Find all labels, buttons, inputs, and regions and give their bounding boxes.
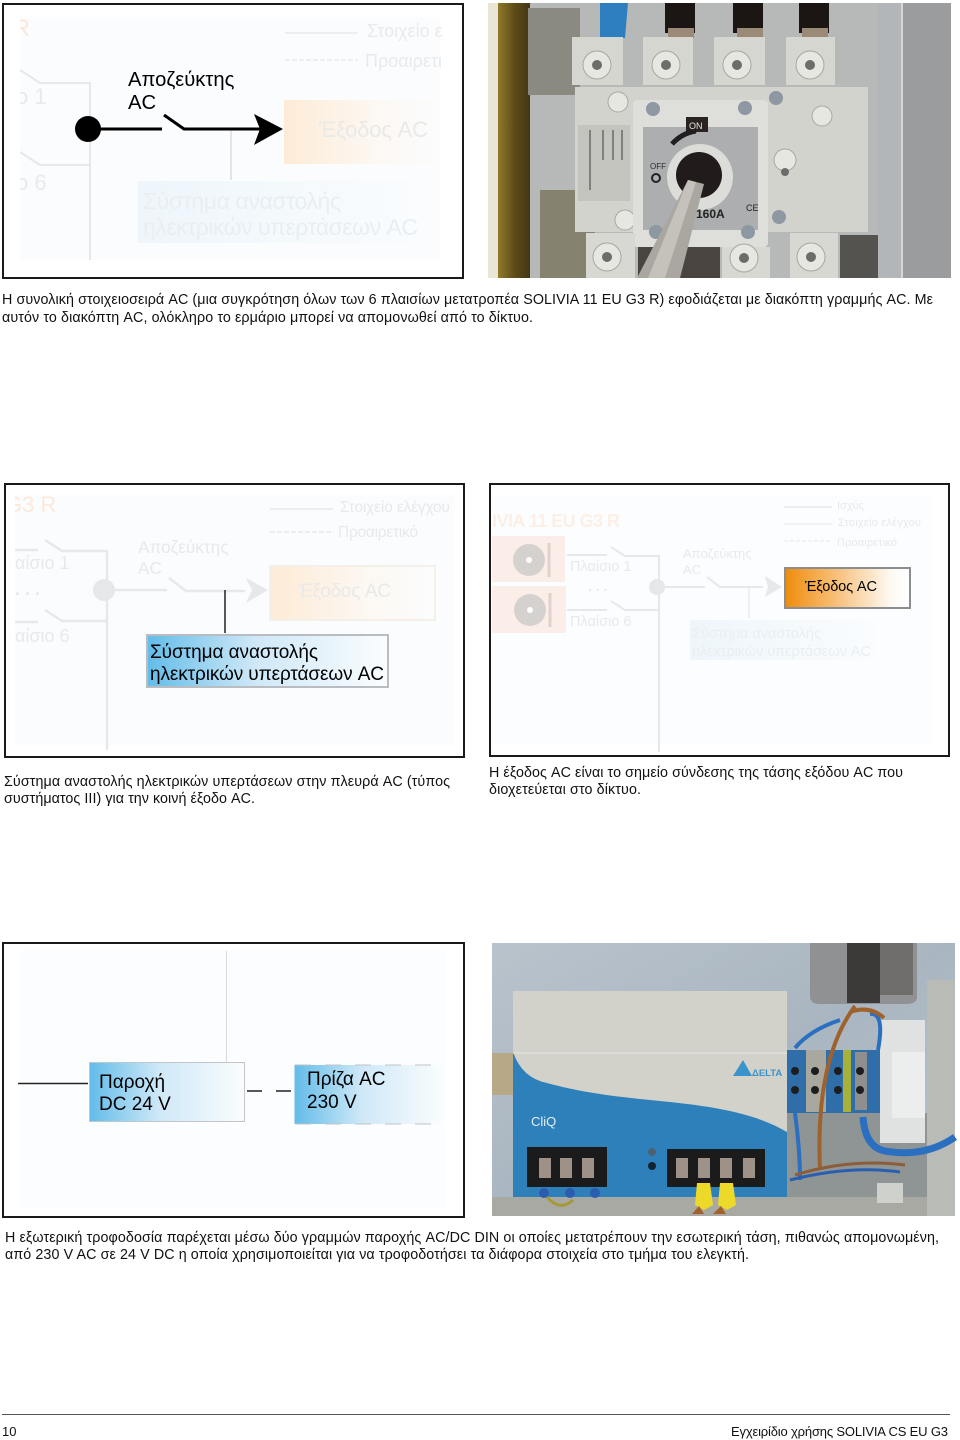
caption: power supply: Η εξωτερική τροφοδοσία παρέχεται μέσω δύο γραμμών παροχής AC/DC DIN οι οποίες μετατρέπουν την εσωτερική τάση, πιθανώς απομονωμένη, (5, 1230, 939, 1246)
footer: page number: 10 (2, 1424, 16, 1439)
faint labels: Στοιχείο ε (367, 21, 443, 41)
terminal blocks (527, 1147, 607, 1187)
photo: AC/DC DIN power supply: CliQ (531, 1114, 556, 1129)
panel: AC surge protection diagram (5, 484, 464, 757)
AC output box: Έξοδος AC (804, 579, 877, 595)
panel: AC surge protection diagram: . . . (15, 579, 40, 599)
panel: AC disconnector diagram: ηλεκτρικών υπερτάσεων AC (143, 214, 418, 240)
AC socket box: 230 V (307, 1092, 357, 1113)
wires (790, 1006, 955, 1180)
DC supply box: DC 24 V (99, 1094, 171, 1115)
surge protection box: ηλεκτρικών υπερτάσεων AC (150, 664, 384, 685)
DIN terminals (787, 1050, 882, 1113)
caption: AC output: Η έξοδος AC είναι το σημείο σύνδεσης της τάσης εξόδου AC που (489, 765, 903, 781)
photo: AC line switch: CE (746, 203, 759, 213)
panel: AC output diagram: Ισχύς (837, 500, 864, 512)
caption: AC output: διοχετεύεται στο δίκτυο. (489, 782, 641, 798)
panel: AC surge protection diagram: Έξοδος AC (297, 581, 391, 602)
blue ferrules (539, 1188, 600, 1198)
panel: AC output diagram (490, 484, 949, 756)
faint labels: Προαιρετι (365, 51, 442, 71)
caption: AC line switch: αυτόν το διακόπτη AC, ολόκληρο το ερμάριο μπορεί να απομονωθεί από το δίκτυο. (2, 310, 533, 326)
panel: power supply diagram (3, 943, 464, 1217)
yellow lugs (695, 1183, 736, 1210)
DC supply box: Παροχή (99, 1072, 165, 1093)
surge protection box (147, 635, 388, 687)
caption: power supply: από 230 V AC σε 24 V DC η οποία χρησιμοποιείται για να τροφοδοτήσει τα διάφορα στοιχεία στο τμήμα του ελεγκτή. (5, 1247, 749, 1263)
panel: AC output diagram: Στοιχείο ελέγχου (838, 517, 921, 529)
DC supply box (90, 1062, 244, 1122)
photo: AC line switch: 160A (696, 207, 725, 221)
panel: AC surge protection diagram: Στοιχείο ελέγχου (340, 499, 450, 516)
panel: AC output diagram: IVIA 11 EU G3 R (492, 511, 620, 531)
panel: AC surge protection diagram: AC (138, 558, 162, 578)
panel: AC disconnector diagram: Έξοδος AC (318, 117, 428, 142)
AC output box (785, 568, 910, 608)
caption: AC line switch: Η συνολική στοιχειοσειρά AC (μια συγκρότηση όλων των 6 πλαισίων μετατροπέα SOLIVIA 11 EU G3 R) εφοδιάζεται με διακόπτη γραμμής AC. Με (2, 292, 934, 308)
panel: AC output diagram: Προαιρετικό (837, 537, 897, 549)
panel: AC output diagram: Σύστημα αναστολής (692, 626, 821, 642)
surge connector (224, 590, 226, 633)
panel: AC output diagram: AC (683, 562, 701, 577)
disconnector label: AC (128, 92, 156, 114)
disconnector label: Αποζεύκτης (128, 69, 235, 91)
device body (513, 991, 787, 1197)
panel: AC output diagram: . . . (588, 578, 607, 594)
panel: AC disconnector diagram: ο 6 (16, 170, 47, 195)
panel: AC disconnector diagram: ο 1 (16, 84, 47, 109)
panel: AC surge protection diagram: Προαιρετικό (338, 524, 418, 541)
panel: AC output diagram: Πλαίσιο 1 (570, 559, 631, 575)
caption: AC surge protection: συστήματος ΙΙΙ) για την κοινή έξοδο AC. (4, 791, 255, 807)
panel: AC surge protection diagram: αίσιο 1 (15, 553, 70, 573)
photo: AC line switch (488, 3, 951, 278)
photo: AC/DC DIN power supply: ΔELTA (752, 1068, 782, 1079)
panel: AC disconnector diagram: Σύστημα αναστολής (143, 188, 341, 214)
switch and arrow (75, 114, 283, 145)
photo: AC line switch: ON (689, 121, 702, 131)
panel: AC surge protection diagram: Αποζεύκτης (138, 537, 229, 557)
panel: AC surge protection diagram: αίσιο 6 (15, 626, 70, 646)
AC socket box (294, 1065, 444, 1124)
photo: AC/DC DIN power supply (492, 943, 955, 1216)
surge protection box: Σύστημα αναστολής (150, 642, 318, 663)
enclosure opening (810, 943, 917, 1004)
faint labels (285, 21, 443, 71)
panel: AC output diagram: ηλεκτρικών υπερτάσεων AC (692, 644, 871, 660)
footer: manual title: Εγχειρίδιο χρήσης SOLIVIA CS EU G3 (731, 1424, 948, 1439)
panel: AC output diagram: Πλαίσιο 6 (570, 614, 631, 630)
panel: AC disconnector diagram (0, 4, 463, 278)
panel: AC output diagram: Αποζεύκτης (683, 546, 751, 561)
AC socket box: Πρίζα AC (307, 1069, 386, 1090)
panel: AC surge protection diagram: G3 R (5, 492, 56, 517)
photo: AC line switch: OFF (650, 162, 666, 171)
caption: AC surge protection: Σύστημα αναστολής ηλεκτρικών υπερτάσεων στην πλευρά AC (τύπος (4, 774, 450, 790)
